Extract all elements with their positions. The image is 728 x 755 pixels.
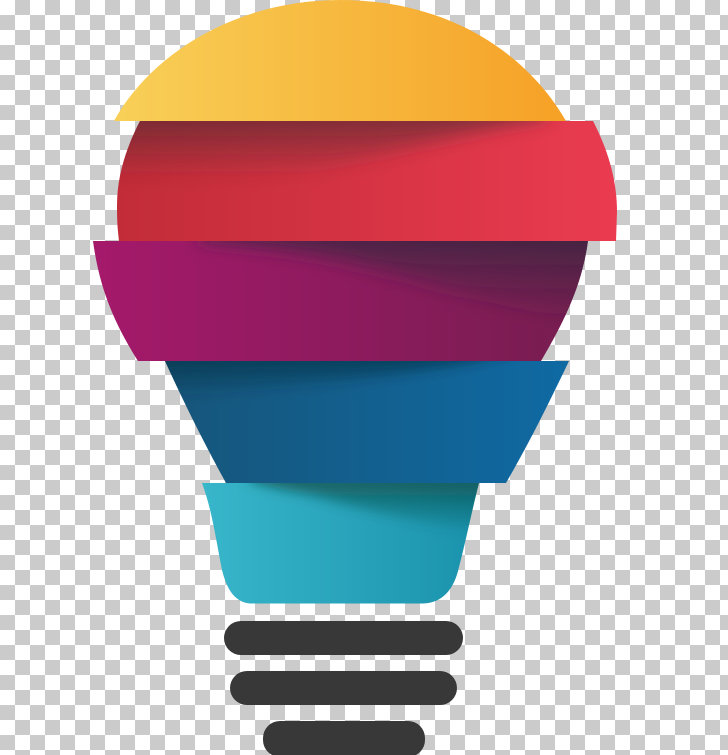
layer 2: red band (117, 121, 617, 241)
screw thread bar 3 (263, 721, 425, 755)
layer 3: purple band (93, 241, 588, 361)
screw thread bar 2 (230, 671, 457, 705)
layer 5: teal base (202, 483, 479, 604)
layer 1: yellow dome (114, 0, 566, 121)
layer 4: blue band (165, 361, 569, 483)
screw thread bar 1 (224, 621, 463, 655)
